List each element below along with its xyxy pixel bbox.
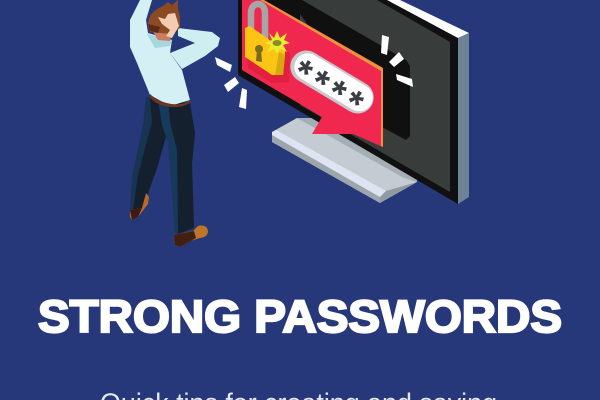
hair shade bbox=[148, 24, 160, 33]
password field bbox=[278, 45, 380, 131]
front leg bbox=[158, 100, 195, 234]
right arm bbox=[170, 28, 220, 69]
spark icon bbox=[265, 31, 290, 54]
monitor bbox=[238, 0, 469, 204]
password asterisks: **** bbox=[285, 52, 374, 128]
collar shadow bbox=[147, 34, 172, 48]
padlock icon bbox=[245, 4, 290, 83]
hand bbox=[158, 13, 179, 38]
waistband bbox=[150, 94, 190, 107]
monitor stand bbox=[272, 118, 417, 203]
burst marks left bbox=[215, 57, 247, 109]
neck bbox=[152, 30, 172, 41]
banner shadow bbox=[290, 0, 410, 140]
hair bbox=[148, 0, 180, 34]
stressed man figure bbox=[130, 0, 220, 247]
front shoe bbox=[174, 226, 208, 247]
alert banner bbox=[242, 0, 383, 147]
shirt body and left arm bbox=[130, 0, 190, 106]
back shoe bbox=[130, 193, 149, 220]
back leg bbox=[130, 97, 172, 211]
title: STRONG PASSWORDS bbox=[38, 291, 562, 342]
burst marks right bbox=[381, 35, 413, 87]
